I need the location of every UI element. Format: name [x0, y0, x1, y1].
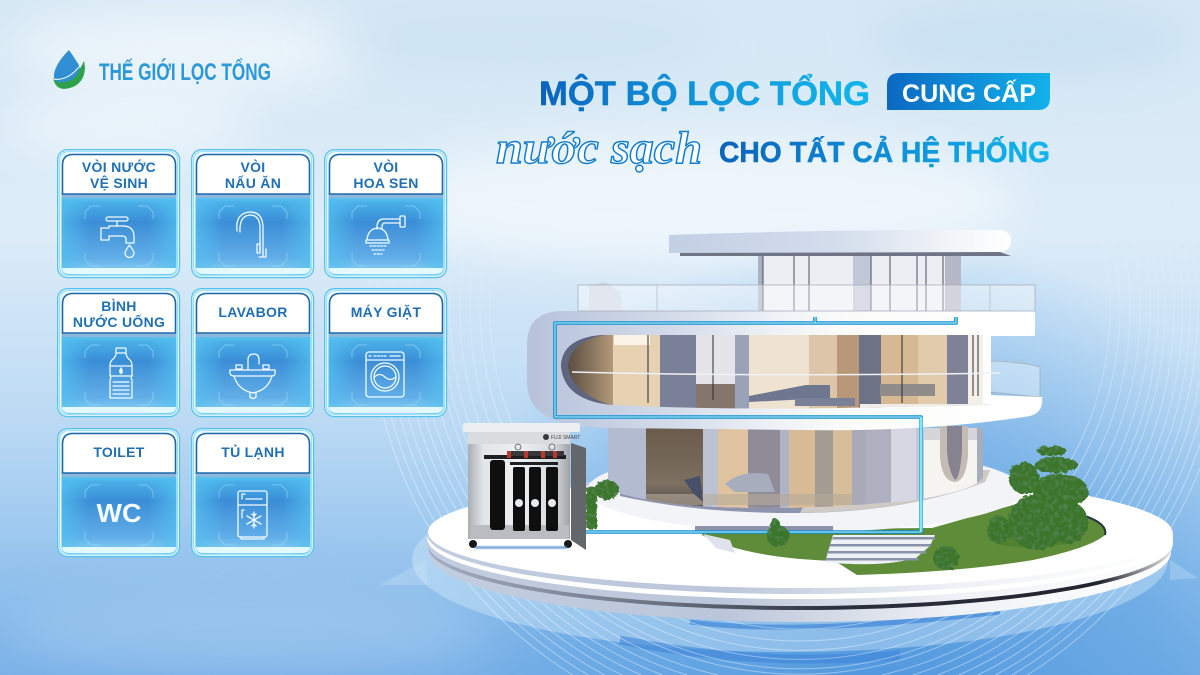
stairs: [703, 534, 935, 564]
card: vòi nấu ăn: [192, 150, 314, 278]
card: vòi nước vệ sinh: [58, 150, 180, 278]
icon: tap: [101, 217, 134, 257]
script words: nước sạch: [496, 122, 702, 173]
card: máy giặt: [325, 289, 447, 417]
shrub: front lawn: [767, 519, 959, 570]
card: bình nước uống: NƯỚC UỐNG: [73, 313, 165, 330]
card: vòi hoa sen: [325, 150, 447, 278]
card: máy giặt: MÁY GIẶT: [351, 304, 421, 320]
icon: water drop logo: [53, 50, 85, 89]
floor slab: [527, 311, 1042, 430]
brand name: THẾ GIỚI LỌC TỔNG: [99, 58, 271, 86]
wheels: [469, 540, 572, 548]
card: vòi hoa sen: VÒI: [373, 158, 399, 175]
card: lavabor: LAVABOR: [218, 304, 288, 320]
card: vòi nấu ăn: VÒI: [240, 158, 266, 175]
logo: [53, 50, 271, 89]
shrub: left of house: [586, 480, 619, 529]
panel: water outlets grid: [58, 150, 447, 557]
water pipe line: [555, 317, 956, 532]
icon: refrigerator: [238, 491, 267, 539]
building ground floor: [608, 426, 983, 508]
card: lavabor: [192, 289, 314, 417]
badge: cung cấp: CUNG CẤP: [902, 79, 1036, 108]
card: bình nước uống: BÌNH: [101, 298, 137, 314]
glass railing: [578, 282, 1035, 311]
balcony glass right: [990, 361, 1040, 397]
title line 2: CHO TẤT CẢ HỆ THỐNG: [719, 135, 1050, 169]
cabinet door: [571, 443, 586, 550]
water ripple rings under the platform: [380, 305, 1200, 675]
brand plate: FUJI SMART: [551, 435, 580, 441]
card: vòi nước vệ sinh: VÒI NƯỚC: [82, 158, 156, 175]
cabinet body: [468, 431, 570, 539]
platform base disc: [427, 474, 1173, 622]
card: bình nước uống: [58, 289, 180, 417]
card: vòi nước vệ sinh: VỆ SINH: [90, 174, 148, 191]
roof: [669, 230, 1011, 256]
building middle floor: [527, 311, 1042, 430]
badge: cung cấp: [887, 73, 1050, 110]
lower terrace: [587, 448, 1023, 532]
title: [496, 73, 1050, 173]
card: tủ lạnh: TỦ LẠNH: [221, 443, 285, 460]
icon: WC text: WC: [96, 498, 142, 528]
title line 1: MỘT BỘ LỌC TỔNG: [539, 74, 870, 113]
card: tủ lạnh: [192, 429, 314, 557]
icon: wash basin: [230, 354, 275, 398]
card: toilet: TOILET: [93, 444, 145, 460]
icon: kitchen faucet: [237, 212, 266, 257]
icon: washing machine: [366, 352, 404, 397]
card: vòi hoa sen: HOA SEN: [353, 175, 419, 191]
pipe manifold: [484, 444, 566, 465]
icon: shower head: [366, 216, 405, 254]
filter cartridges: [490, 460, 558, 531]
building top floor: [578, 230, 1035, 311]
lawn: [702, 505, 1105, 575]
interior rooms: [560, 334, 991, 410]
icon: water bottle: [110, 348, 132, 398]
oval window: [940, 426, 968, 482]
tree: right big: [987, 446, 1088, 550]
card: vòi nấu ăn: NẤU ĂN: [225, 175, 281, 191]
card: toilet: [58, 429, 180, 557]
trees and shrubs: [586, 446, 1088, 570]
filter cabinet: [463, 423, 586, 550]
